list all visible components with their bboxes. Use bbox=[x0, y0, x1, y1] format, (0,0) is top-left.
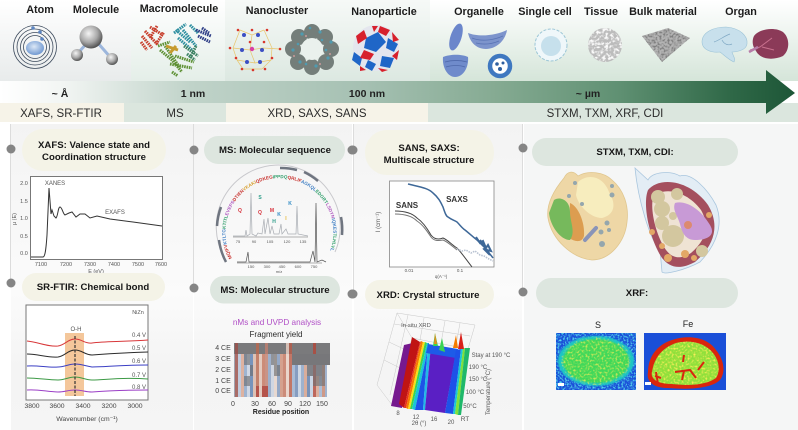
chart: XAFS spectrum: XANES bbox=[45, 181, 65, 187]
heading: XRF: XRF: bbox=[626, 288, 648, 299]
icon: tissue bbox=[588, 28, 622, 62]
dot marker bbox=[6, 144, 16, 154]
chart: MS sequence map: 135 bbox=[300, 239, 307, 244]
chart: fragment yield heatmap: 150 bbox=[316, 401, 328, 408]
chart: FTIR spectra: 3800 bbox=[24, 403, 40, 410]
chart: XAFS spectrum: 7400 bbox=[108, 262, 120, 268]
chart: fragment yield heatmap: 120 bbox=[299, 401, 311, 408]
chart: MS sequence map: K bbox=[277, 212, 281, 218]
technique band bbox=[0, 103, 798, 122]
heading: MS sequence bbox=[204, 136, 345, 164]
heading: XRF bbox=[536, 278, 738, 308]
icon: single cell bbox=[535, 29, 567, 61]
panel: SANS SAXS bbox=[348, 130, 494, 279]
heading: XRD: XRD: Crystal structure bbox=[377, 290, 479, 301]
chart: FTIR spectra: 0.4 V bbox=[132, 333, 146, 339]
heatmap title: nMs and UVPD analysis bbox=[233, 318, 321, 327]
panel: XAFS bbox=[6, 129, 167, 275]
icon: atom bbox=[14, 26, 56, 68]
chart: fragment yield heatmap: 2 CE bbox=[215, 367, 231, 374]
chart: XAFS spectrum: 7300 bbox=[84, 262, 96, 268]
chart: in-situ XRD surface: 150 °C bbox=[469, 377, 488, 383]
heading: SR-FTIR bbox=[22, 273, 165, 301]
chart: in-situ XRD surface: 8 bbox=[396, 411, 400, 417]
chart: MS sequence map: MQIFVKTLTGKTITLEVEPSDTIENVKAKIQDKEGIPPDQQRLIFAGKQLEDGRTLSDYN IQKES TLHLV LRLRG bbox=[222, 175, 337, 260]
chart: in-situ XRD surface: 100 °C bbox=[466, 390, 485, 396]
icon: brain bbox=[702, 27, 747, 62]
scale labels row: Organelle bbox=[454, 6, 504, 18]
chart: XAFS spectrum: 2.0 bbox=[20, 181, 28, 187]
chart: S element map: S bbox=[595, 320, 601, 330]
chart: fragment yield heatmap: 3 CE bbox=[215, 356, 231, 363]
chart: XAFS spectrum: EXAFS bbox=[105, 210, 125, 216]
heatmap title: Fragment yield bbox=[250, 330, 302, 339]
scale arrow: 100 nm bbox=[349, 88, 385, 100]
chart: fragment yield heatmap: 4 CE bbox=[215, 345, 231, 352]
chart: MS sequence map: 90 bbox=[252, 239, 257, 244]
chart: in-situ XRD surface: 12 bbox=[413, 415, 420, 421]
icon: nanocluster ring bbox=[285, 24, 339, 75]
chart: FTIR spectra: 3600 bbox=[49, 403, 65, 410]
heading: XAFS: XAFS: Valence state and bbox=[38, 140, 150, 151]
icon: organelles bbox=[443, 22, 510, 77]
heading: XRD bbox=[365, 280, 494, 309]
chart: scattering curves: SAXS bbox=[446, 195, 469, 204]
heading: SANS SAXS: Multiscale structure bbox=[384, 155, 474, 166]
scale labels row: Atom bbox=[26, 4, 54, 16]
chart: FTIR spectra bbox=[24, 305, 148, 423]
chart: XAFS spectrum: 7500 bbox=[132, 262, 144, 268]
dot marker bbox=[348, 290, 358, 298]
heading: XAFS: Coordination structure bbox=[42, 152, 146, 163]
chart: XAFS spectrum: E (eV) bbox=[88, 269, 104, 275]
chart: XAFS spectrum: 0.0 bbox=[20, 251, 28, 257]
column backgrounds bbox=[10, 124, 798, 430]
chart: MS sequence map: m/z bbox=[276, 269, 282, 274]
scale labels row: Molecule bbox=[73, 4, 119, 16]
scale labels row: Nanocluster bbox=[246, 5, 309, 17]
panel: XRF bbox=[518, 278, 738, 390]
chart: in-situ XRD surface: 2θ (°) bbox=[412, 421, 426, 427]
icon: spleen organ bbox=[749, 29, 788, 59]
dot marker bbox=[348, 146, 358, 154]
heading: MS sequence: MS: Molecular sequence bbox=[219, 145, 331, 156]
chart: in-situ XRD surface: In-situ XRD bbox=[401, 323, 431, 329]
chart: scattering curves bbox=[376, 181, 494, 279]
chart: FTIR spectra: 0.5 V bbox=[132, 346, 146, 352]
heatmap title bbox=[233, 318, 321, 339]
heading: MS structure: MS: Molecular structure bbox=[220, 285, 330, 296]
dot marker bbox=[518, 288, 528, 296]
heading: XAFS bbox=[22, 129, 166, 171]
icon: molecule bbox=[71, 26, 118, 65]
chart: in-situ XRD surface: 16 bbox=[431, 417, 438, 423]
chart: MS sequence map: M bbox=[270, 208, 274, 214]
icon: macromolecule protein bbox=[141, 24, 211, 76]
chart: MS sequence map: Q bbox=[238, 208, 242, 214]
scale arrow bbox=[0, 70, 795, 114]
technique band: STXM, TXM, XRF, CDI bbox=[547, 108, 663, 120]
panel: MS bbox=[190, 136, 353, 416]
chart: fragment yield heatmap: 0 CE bbox=[215, 388, 231, 395]
scale labels row: Single cell bbox=[518, 6, 572, 18]
chart: fragment yield heatmap: 30 bbox=[251, 401, 259, 408]
chart: S element map bbox=[556, 320, 636, 390]
scale labels row bbox=[26, 3, 757, 18]
chart: in-situ XRD surface: 20 bbox=[448, 420, 455, 426]
chart: scattering curves: SANS bbox=[396, 201, 419, 210]
chart: MS sequence map bbox=[216, 164, 344, 274]
dot marker bbox=[518, 144, 528, 152]
chart: FTIR spectra: NiZn bbox=[132, 310, 144, 316]
chart: MS sequence map: 120 bbox=[284, 239, 291, 244]
scale labels row: Nanoparticle bbox=[351, 6, 417, 18]
chart: scattering curves: I (cm⁻¹) bbox=[376, 212, 382, 232]
chart: FTIR spectra: Wavenumber (cm⁻¹) bbox=[56, 416, 118, 423]
chart: fragment yield heatmap: 1 CE bbox=[215, 378, 231, 385]
chart: MS sequence map: K bbox=[288, 201, 292, 207]
icon: bulk material bbox=[642, 28, 690, 62]
chart: XAFS spectrum: 1.5 bbox=[20, 199, 28, 205]
chart: fragment yield heatmap bbox=[215, 343, 330, 416]
dot marker bbox=[6, 278, 16, 288]
chart: in-situ XRD surface: 50°C bbox=[463, 404, 477, 410]
technique band: XRD, SAXS, SANS bbox=[267, 108, 367, 120]
chart: scattering curves: q(A⁻¹) bbox=[435, 274, 448, 279]
chart: MS sequence map: 105 bbox=[267, 239, 274, 244]
chart: XAFS spectrum: 7200 bbox=[60, 262, 72, 268]
illustration: cell reconstruction 2 bbox=[635, 168, 719, 273]
technique band: XAFS, SR-FTIR bbox=[20, 108, 102, 120]
chart: scattering curves: 0.1 bbox=[457, 268, 464, 273]
chart: MS sequence map: I bbox=[285, 216, 287, 222]
chart: fragment yield heatmap: Residue position bbox=[253, 409, 309, 416]
chart: in-situ XRD surface: Temperature (°C) bbox=[486, 369, 492, 415]
chart: FTIR spectra: 3400 bbox=[75, 403, 91, 410]
chart: FTIR spectra: 0.8 V bbox=[132, 385, 146, 391]
panel: SR-FTIR bbox=[6, 273, 165, 423]
chart: Fe element map: Fe bbox=[683, 319, 693, 329]
chart: Fe element map bbox=[644, 319, 726, 390]
chart: fragment yield heatmap: 0 bbox=[231, 401, 235, 408]
heading: SANS SAXS bbox=[365, 130, 494, 175]
chart: FTIR spectra: 3200 bbox=[101, 403, 117, 410]
chart: in-situ XRD surface bbox=[377, 313, 511, 427]
heading: SANS SAXS: SANS, SAXS: bbox=[398, 143, 460, 154]
technique band: MS bbox=[166, 108, 184, 120]
chart: scattering curves: 0.01 bbox=[405, 268, 414, 273]
chart: MS sequence map: 75 bbox=[236, 239, 241, 244]
heading: STXM bbox=[532, 138, 738, 166]
chart: XAFS spectrum: μ (E) bbox=[12, 213, 18, 225]
chart: in-situ XRD surface: Stay at 190 °C bbox=[472, 353, 511, 359]
chart: XAFS spectrum bbox=[12, 176, 167, 275]
chart: in-situ XRD surface: RT bbox=[461, 416, 469, 423]
chart: MS sequence map: 150 bbox=[248, 264, 255, 269]
scale labels row: Tissue bbox=[584, 6, 618, 18]
chart: XAFS spectrum: 1.0 bbox=[20, 216, 28, 222]
scale labels row: Bulk material bbox=[629, 6, 697, 18]
illustration: cell reconstruction 1 bbox=[548, 172, 627, 260]
chart: fragment yield heatmap: 90 bbox=[284, 401, 292, 408]
scale labels row: Macromolecule bbox=[140, 3, 218, 15]
chart: FTIR spectra: 0.6 V bbox=[132, 359, 146, 365]
chart: in-situ XRD surface: 190 °C bbox=[469, 365, 488, 371]
chart: XAFS spectrum: 0.5 bbox=[20, 234, 28, 240]
heading: STXM: STXM, TXM, CDI: bbox=[596, 147, 674, 158]
icon: nanocluster molecule bbox=[229, 29, 281, 71]
chart: fragment yield heatmap: 60 bbox=[268, 401, 276, 408]
icon: nanoparticle bbox=[352, 25, 399, 72]
chart: FTIR spectra: O-H bbox=[70, 327, 82, 333]
scale arrow: ~ µm bbox=[576, 88, 600, 100]
heading: MS structure bbox=[210, 276, 340, 304]
dot markers bbox=[190, 146, 356, 298]
scale arrow: ~ Å bbox=[52, 87, 69, 100]
chart: FTIR spectra: 0.7 V bbox=[132, 373, 146, 379]
chart: XAFS spectrum: 7100 bbox=[35, 262, 47, 268]
chart: MS sequence map: 750 bbox=[311, 264, 318, 269]
chart: FTIR spectra: 3000 bbox=[127, 403, 143, 410]
panel: STXM TXM CDI bbox=[518, 138, 738, 273]
header backgrounds bbox=[0, 0, 798, 81]
panel: XRD bbox=[348, 280, 511, 427]
chart: MS sequence map: 600 bbox=[295, 264, 302, 269]
chart: MS sequence map: Q bbox=[258, 210, 262, 216]
chart: MS sequence map: S bbox=[258, 195, 262, 201]
scale arrow: 1 nm bbox=[181, 88, 205, 100]
heading: SR-FTIR: SR-FTIR: Chemical bond bbox=[37, 282, 149, 293]
scale labels row: Organ bbox=[725, 6, 757, 18]
chart: XAFS spectrum: 7600 bbox=[155, 262, 167, 268]
chart: MS sequence map: 300 bbox=[264, 264, 271, 269]
chart: MS sequence map: H bbox=[272, 219, 276, 225]
chart: MS sequence map: 450 bbox=[279, 264, 286, 269]
